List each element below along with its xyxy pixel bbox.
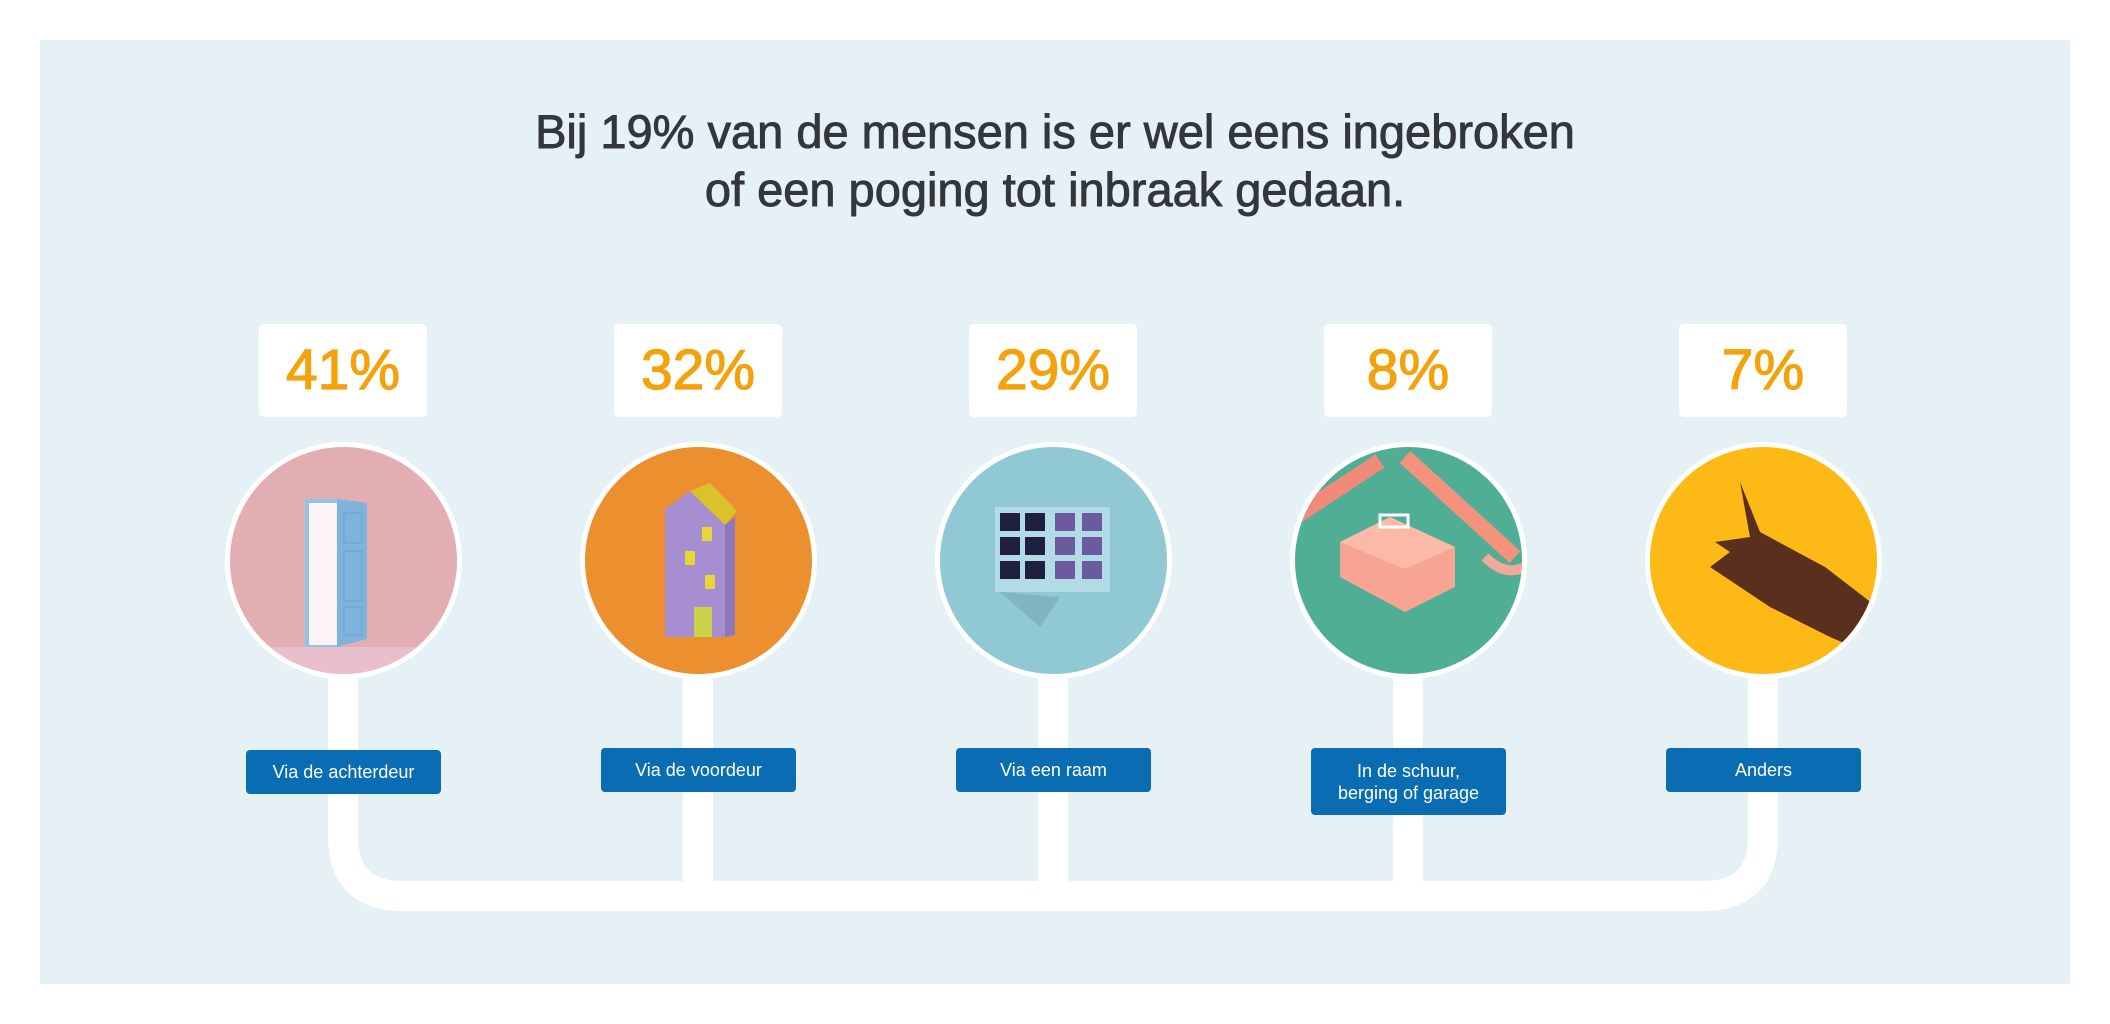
title: Bij 19% van de mensen is er wel eens ingebroken (535, 105, 1575, 158)
stat: 41%: 41% (286, 338, 400, 402)
title (535, 105, 1575, 216)
stat: 32%: 32% (641, 338, 755, 402)
label: achterdeur (246, 750, 441, 794)
icon: house (580, 442, 817, 679)
label: schuur (1311, 748, 1506, 815)
icon: open door (225, 442, 462, 679)
stat: 29%: 29% (996, 338, 1110, 402)
label: voordeur (601, 748, 796, 792)
label: achterdeur: Via de achterdeur (273, 762, 414, 782)
icon: hand (1645, 442, 1882, 679)
label: schuur: berging of garage (1338, 782, 1479, 802)
stat: 29% (969, 324, 1137, 417)
label: anders (1666, 748, 1861, 792)
stat: 8%: 8% (1367, 338, 1449, 402)
stat: 7%: 7% (1722, 338, 1804, 402)
icon: toolbox (1290, 442, 1527, 679)
stat: 8% (1324, 324, 1492, 417)
label: raam: Via een raam (1000, 760, 1107, 780)
stat: 41% (259, 324, 427, 417)
label: anders: Anders (1735, 760, 1792, 780)
icon: window (935, 442, 1172, 679)
title: of een poging tot inbraak gedaan. (705, 163, 1405, 216)
label: raam (956, 748, 1151, 792)
stat: 32% (614, 324, 782, 417)
label: voordeur: Via de voordeur (635, 760, 762, 780)
label: schuur: In de schuur, (1357, 760, 1460, 780)
stat: 7% (1679, 324, 1847, 417)
